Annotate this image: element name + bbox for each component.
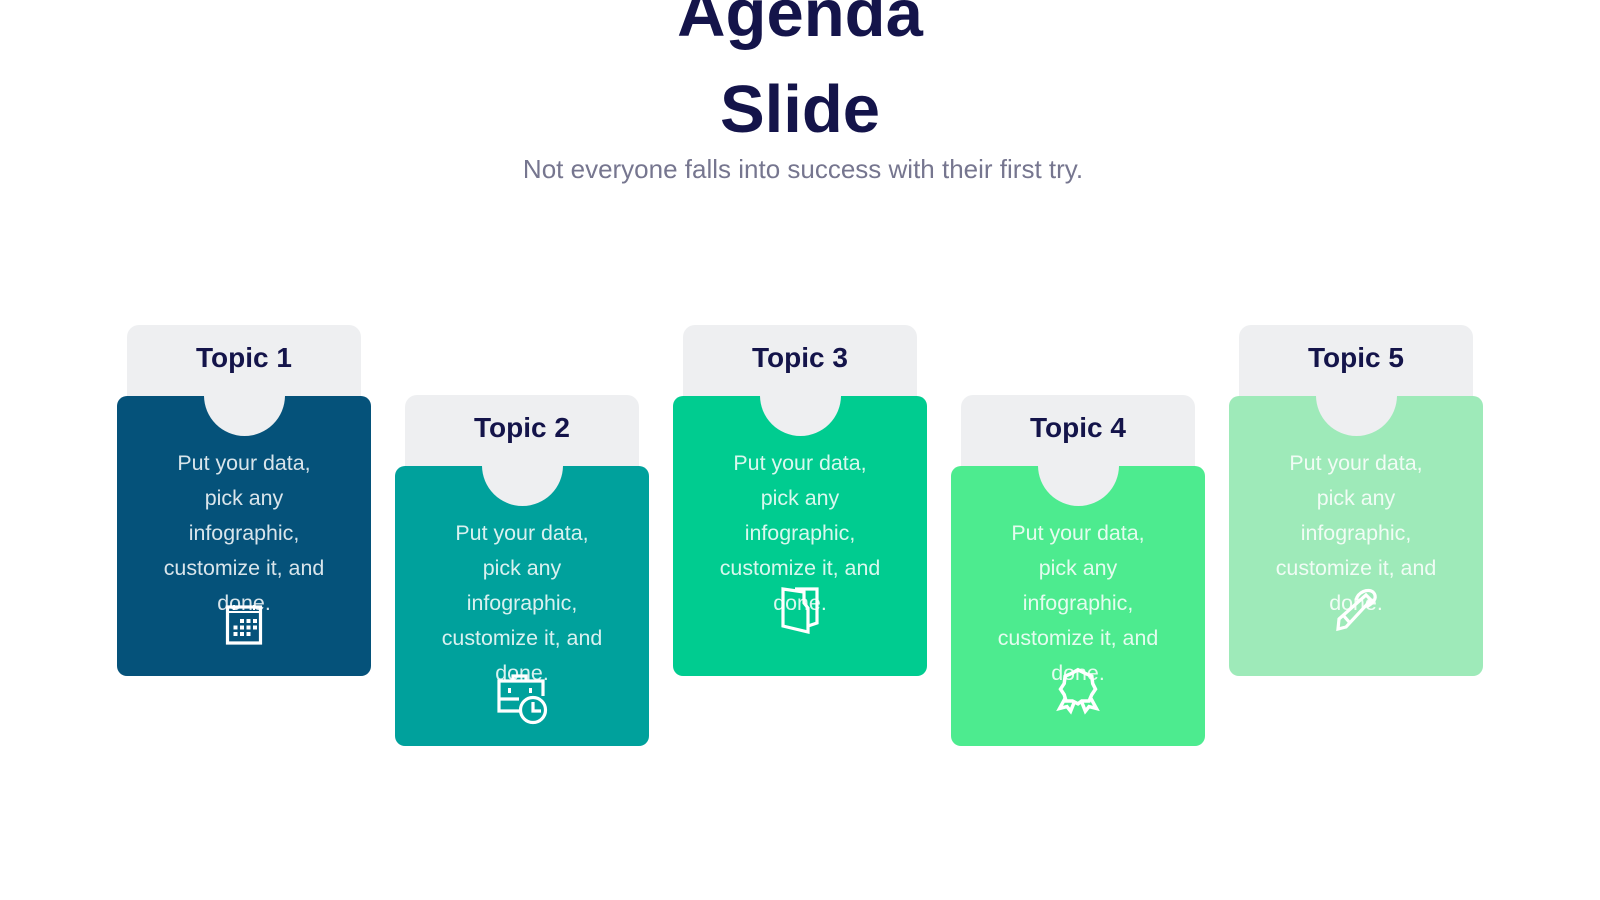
panel: topic 2 [395, 395, 649, 746]
icon: briefcase with clock [497, 674, 548, 724]
topic 1 heading tab [127, 325, 361, 415]
notch [760, 355, 840, 436]
topic 3 text: infographic, [745, 520, 855, 544]
topic 2 heading tab [405, 395, 639, 485]
topic 5 text: done. [1329, 590, 1383, 614]
topic 3 heading tab [683, 325, 917, 415]
icon: award ribbon [1056, 668, 1100, 714]
topic 2 heading tab: Topic 2 [474, 412, 570, 443]
topic 4 text: pick any [1039, 556, 1117, 580]
subtitle: Not everyone falls into success with their first try. [523, 154, 1083, 184]
topic 1 text: infographic, [189, 520, 299, 544]
topic 1 text: done. [217, 590, 271, 614]
topic 4 heading tab [961, 395, 1195, 485]
topic 2 text: Put your data, [455, 520, 589, 544]
topic 4 text: Put your data, [1011, 520, 1145, 544]
topic 2 text: pick any [483, 556, 561, 580]
topic 4 heading tab: Topic 4 [1030, 412, 1126, 443]
panel: topic 5 [1229, 325, 1483, 676]
topic 5 text: infographic, [1301, 520, 1411, 544]
topic 4 text [998, 520, 1158, 684]
topic 3 card [673, 396, 927, 676]
topic 1 text: pick any [205, 486, 283, 510]
notch [204, 355, 284, 436]
icon: door [781, 587, 819, 634]
topic 3 text: done. [773, 590, 827, 614]
topic 4 text: customize it, and [998, 626, 1158, 650]
topic 5 card [1229, 396, 1483, 676]
topic 2 text [442, 520, 602, 684]
notch [482, 425, 562, 506]
icon: pencil [1336, 588, 1377, 632]
topic 4 text: done. [1051, 660, 1105, 684]
title [677, 0, 924, 147]
topic 3 text: pick any [761, 486, 839, 510]
topic 5 text: pick any [1317, 486, 1395, 510]
topic 3 text: customize it, and [720, 556, 880, 580]
topic 3 heading tab: Topic 3 [752, 342, 848, 373]
topic 1 heading tab: Topic 1 [196, 342, 292, 373]
icon: calendar [226, 605, 262, 645]
topic 5 text: Put your data, [1289, 450, 1423, 474]
notch [1038, 425, 1118, 506]
topic 1 text: customize it, and [164, 556, 324, 580]
topic 4 card [951, 466, 1205, 746]
topic 2 text: done. [495, 660, 549, 684]
topic 5 heading tab [1239, 325, 1473, 415]
panel: topic 1 [117, 325, 371, 676]
topic 5 text [1276, 450, 1436, 614]
panel: topic 4 [951, 395, 1205, 746]
title: Slide [720, 72, 880, 147]
topic 2 card [395, 466, 649, 746]
topic 2 text: infographic, [467, 590, 577, 614]
panel: topic 3 [673, 325, 927, 676]
topic 3 text [720, 450, 880, 614]
topic 4 text: infographic, [1023, 590, 1133, 614]
topic 1 text: Put your data, [177, 450, 311, 474]
topic 5 text: customize it, and [1276, 556, 1436, 580]
topic 1 card [117, 396, 371, 676]
topic 1 text [164, 450, 324, 614]
topic 3 text: Put your data, [733, 450, 867, 474]
topic 5 heading tab: Topic 5 [1308, 342, 1404, 373]
notch [1316, 355, 1396, 436]
topic 2 text: customize it, and [442, 626, 602, 650]
